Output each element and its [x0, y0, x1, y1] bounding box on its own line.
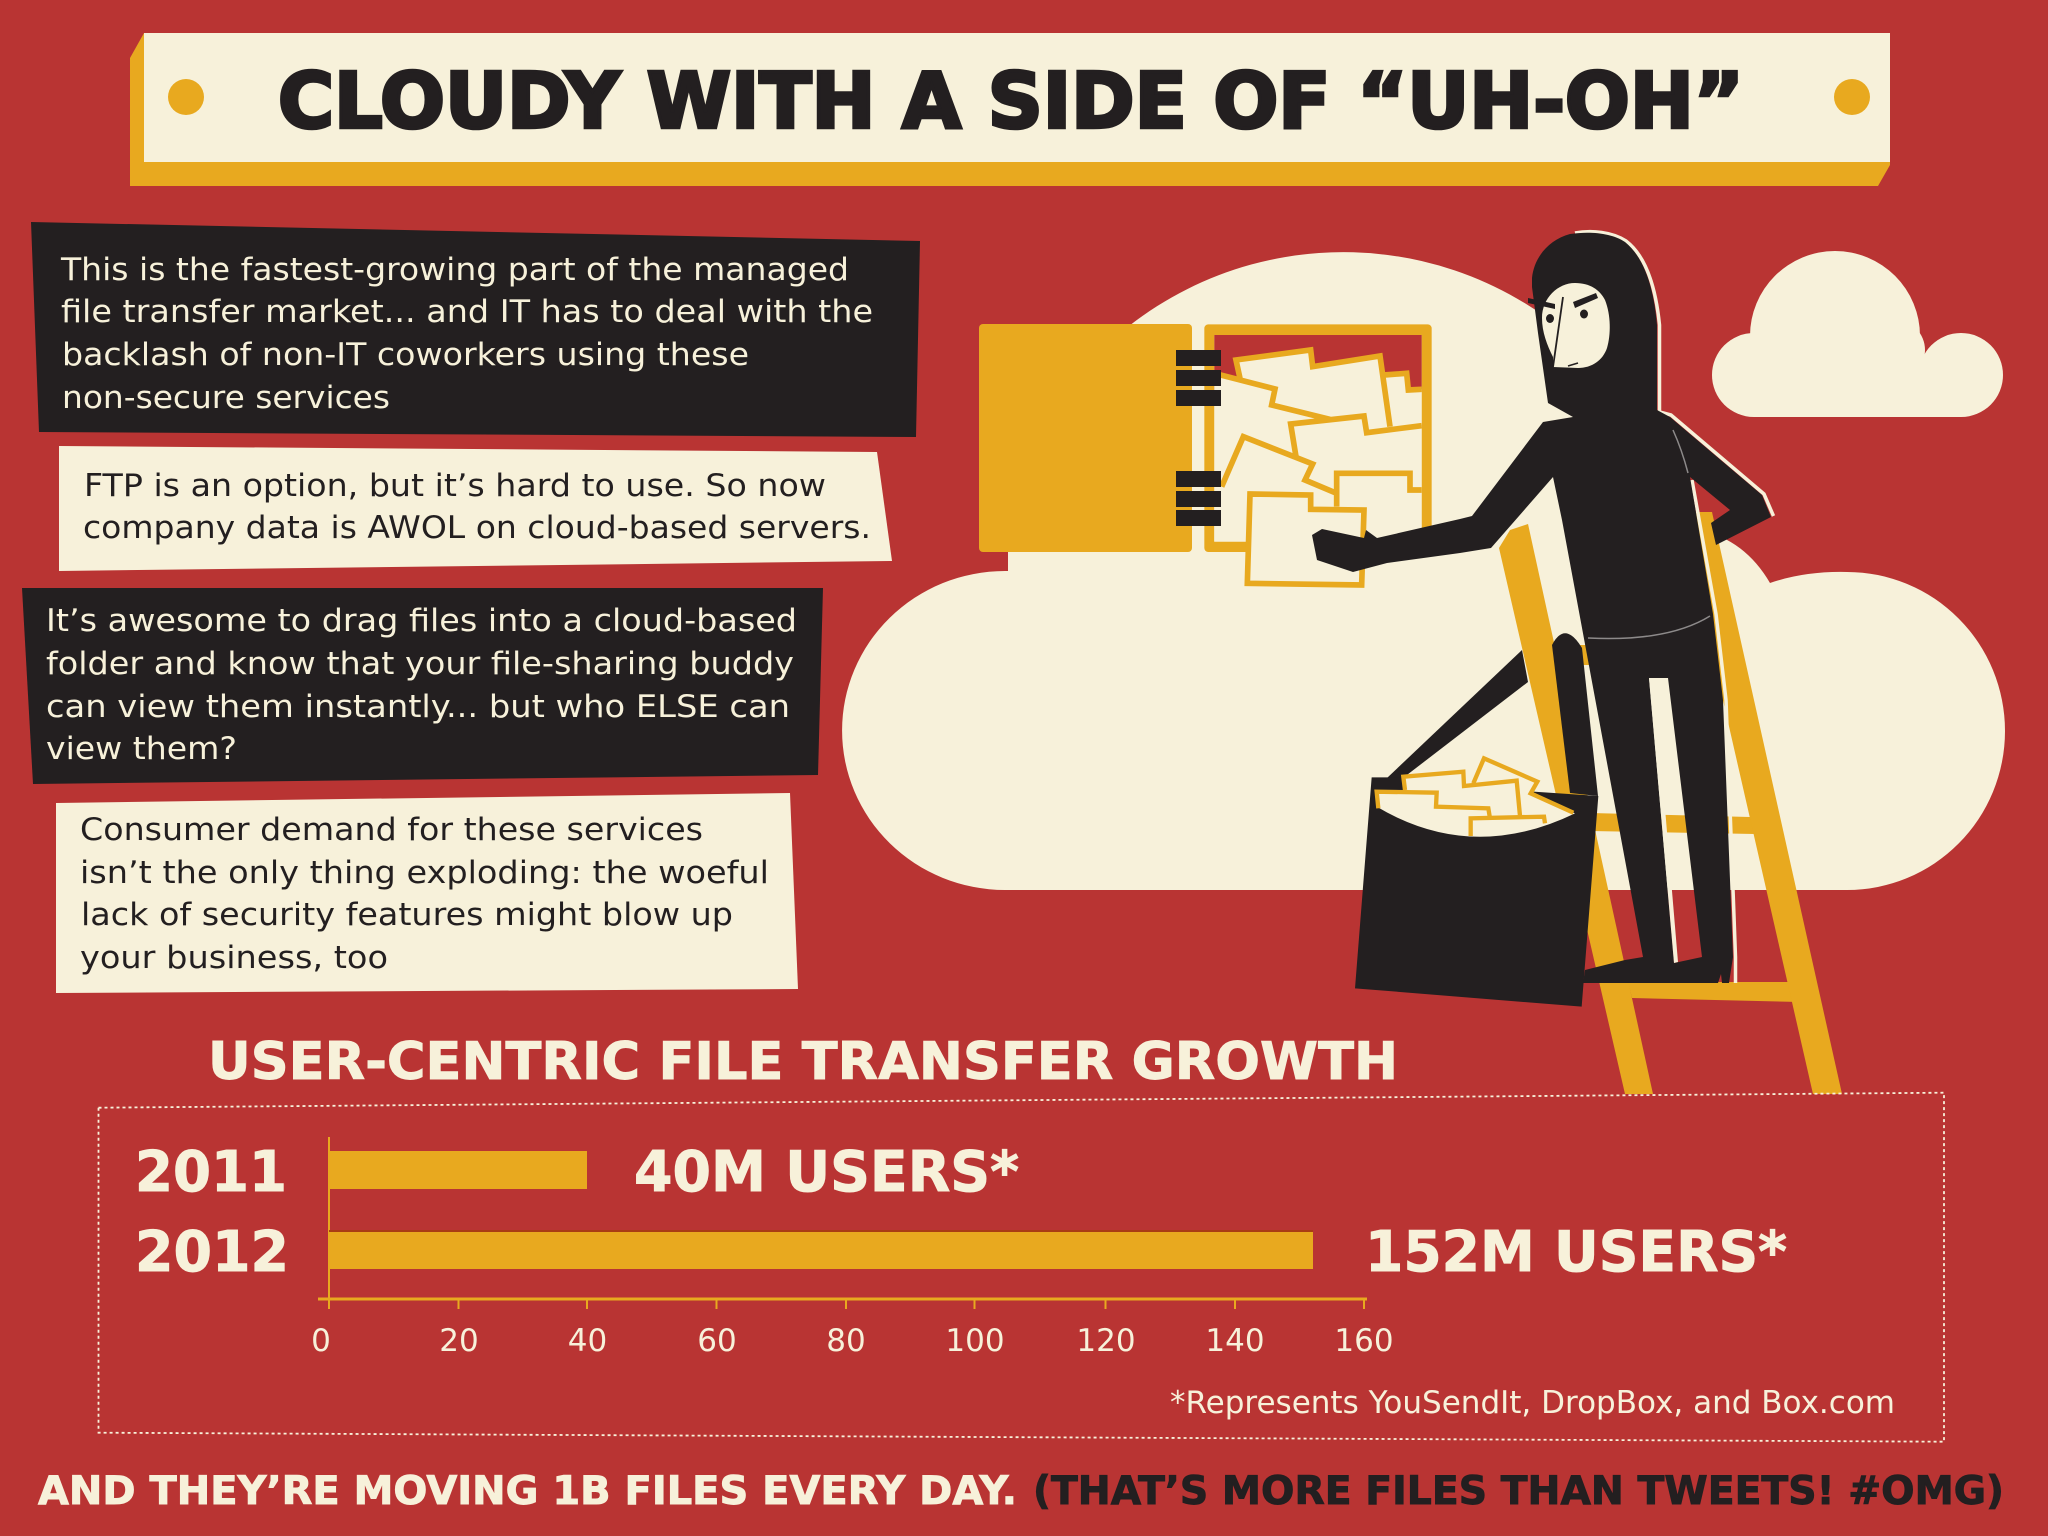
text block: drag files: can view them instantly... but who ELSE can	[46, 689, 790, 725]
ladder	[1499, 512, 1842, 1094]
text block: consumer demand: lack of security features might blow up	[81, 897, 733, 933]
bar 2011: 2011	[135, 1140, 287, 1205]
axis labels: 20	[439, 1323, 479, 1359]
bag with files	[1355, 757, 1598, 1007]
axis labels: 0	[311, 1323, 331, 1359]
text block: drag files	[22, 588, 823, 784]
axes	[318, 1137, 1367, 1309]
bar 2011: 40M USERS*	[634, 1140, 1019, 1205]
text block: drag files: It’s awesome to drag files into a cloud-based	[46, 603, 797, 639]
axis labels	[311, 1323, 1394, 1359]
bottom statement: AND THEY’RE MOVING 1B FILES EVERY DAY.	[38, 1469, 1017, 1514]
small cloud	[1712, 251, 2003, 421]
title banner: CLOUDY WITH A SIDE OF “UH-OH”	[278, 58, 1744, 146]
text block: drag files: folder and know that your file-sharing buddy	[46, 646, 794, 682]
axis labels: 40	[568, 1323, 607, 1359]
text block: consumer demand	[56, 793, 798, 993]
text block: drag files: view them?	[46, 731, 237, 767]
text block: fastest-growing: This is the fastest-growing part of the managed	[60, 252, 849, 288]
bar 2012: 2012	[135, 1220, 289, 1285]
bottom statement	[38, 1469, 2004, 1514]
binder rings	[1176, 350, 1221, 526]
text block: consumer demand: Consumer demand for these services	[80, 812, 703, 848]
bar 2011	[135, 1140, 1019, 1205]
dotted chart frame	[98, 1093, 1944, 1442]
text block: FTP: FTP is an option, but it’s hard to use. So now	[84, 468, 826, 504]
text block: fastest-growing: file transfer market... and IT has to deal with the	[61, 294, 873, 330]
axis labels: 160	[1334, 1323, 1394, 1359]
text block: FTP	[59, 446, 892, 571]
axis labels: 140	[1205, 1323, 1265, 1359]
illustration: folder, files, ladder, thief and bag	[979, 232, 1842, 1094]
bag strap	[1387, 650, 1528, 778]
large cloud	[842, 252, 2005, 890]
axis labels: 120	[1076, 1323, 1136, 1359]
text block: fastest-growing	[31, 222, 920, 437]
bar chart: user growth	[135, 1137, 1787, 1359]
chart heading: USER-CENTRIC FILE TRANSFER GROWTH	[208, 1032, 1398, 1092]
axis labels: 80	[826, 1323, 866, 1359]
text block: consumer demand: isn’t the only thing exploding: the woeful	[80, 855, 769, 891]
axis labels: 60	[697, 1323, 737, 1359]
title banner	[130, 33, 1890, 186]
open folder tray with files	[1204, 324, 1432, 585]
bar 2012: 152M USERS*	[1365, 1220, 1787, 1285]
thief figure	[1312, 232, 1774, 983]
text block: consumer demand: your business, too	[80, 940, 388, 976]
text block: fastest-growing: non-secure services	[62, 380, 390, 416]
text block: fastest-growing: backlash of non-IT coworkers using these	[62, 337, 749, 373]
face	[1528, 283, 1610, 368]
text block: FTP: company data is AWOL on cloud-based servers.	[83, 510, 871, 546]
bar 2012	[135, 1220, 1787, 1285]
axis labels: 100	[945, 1323, 1005, 1359]
bottom statement: (THAT’S MORE FILES THAN TWEETS! #OMG)	[1033, 1469, 2004, 1514]
footnote: *Represents YouSendIt, DropBox, and Box.com	[1170, 1385, 1895, 1421]
folder cover	[979, 324, 1192, 552]
